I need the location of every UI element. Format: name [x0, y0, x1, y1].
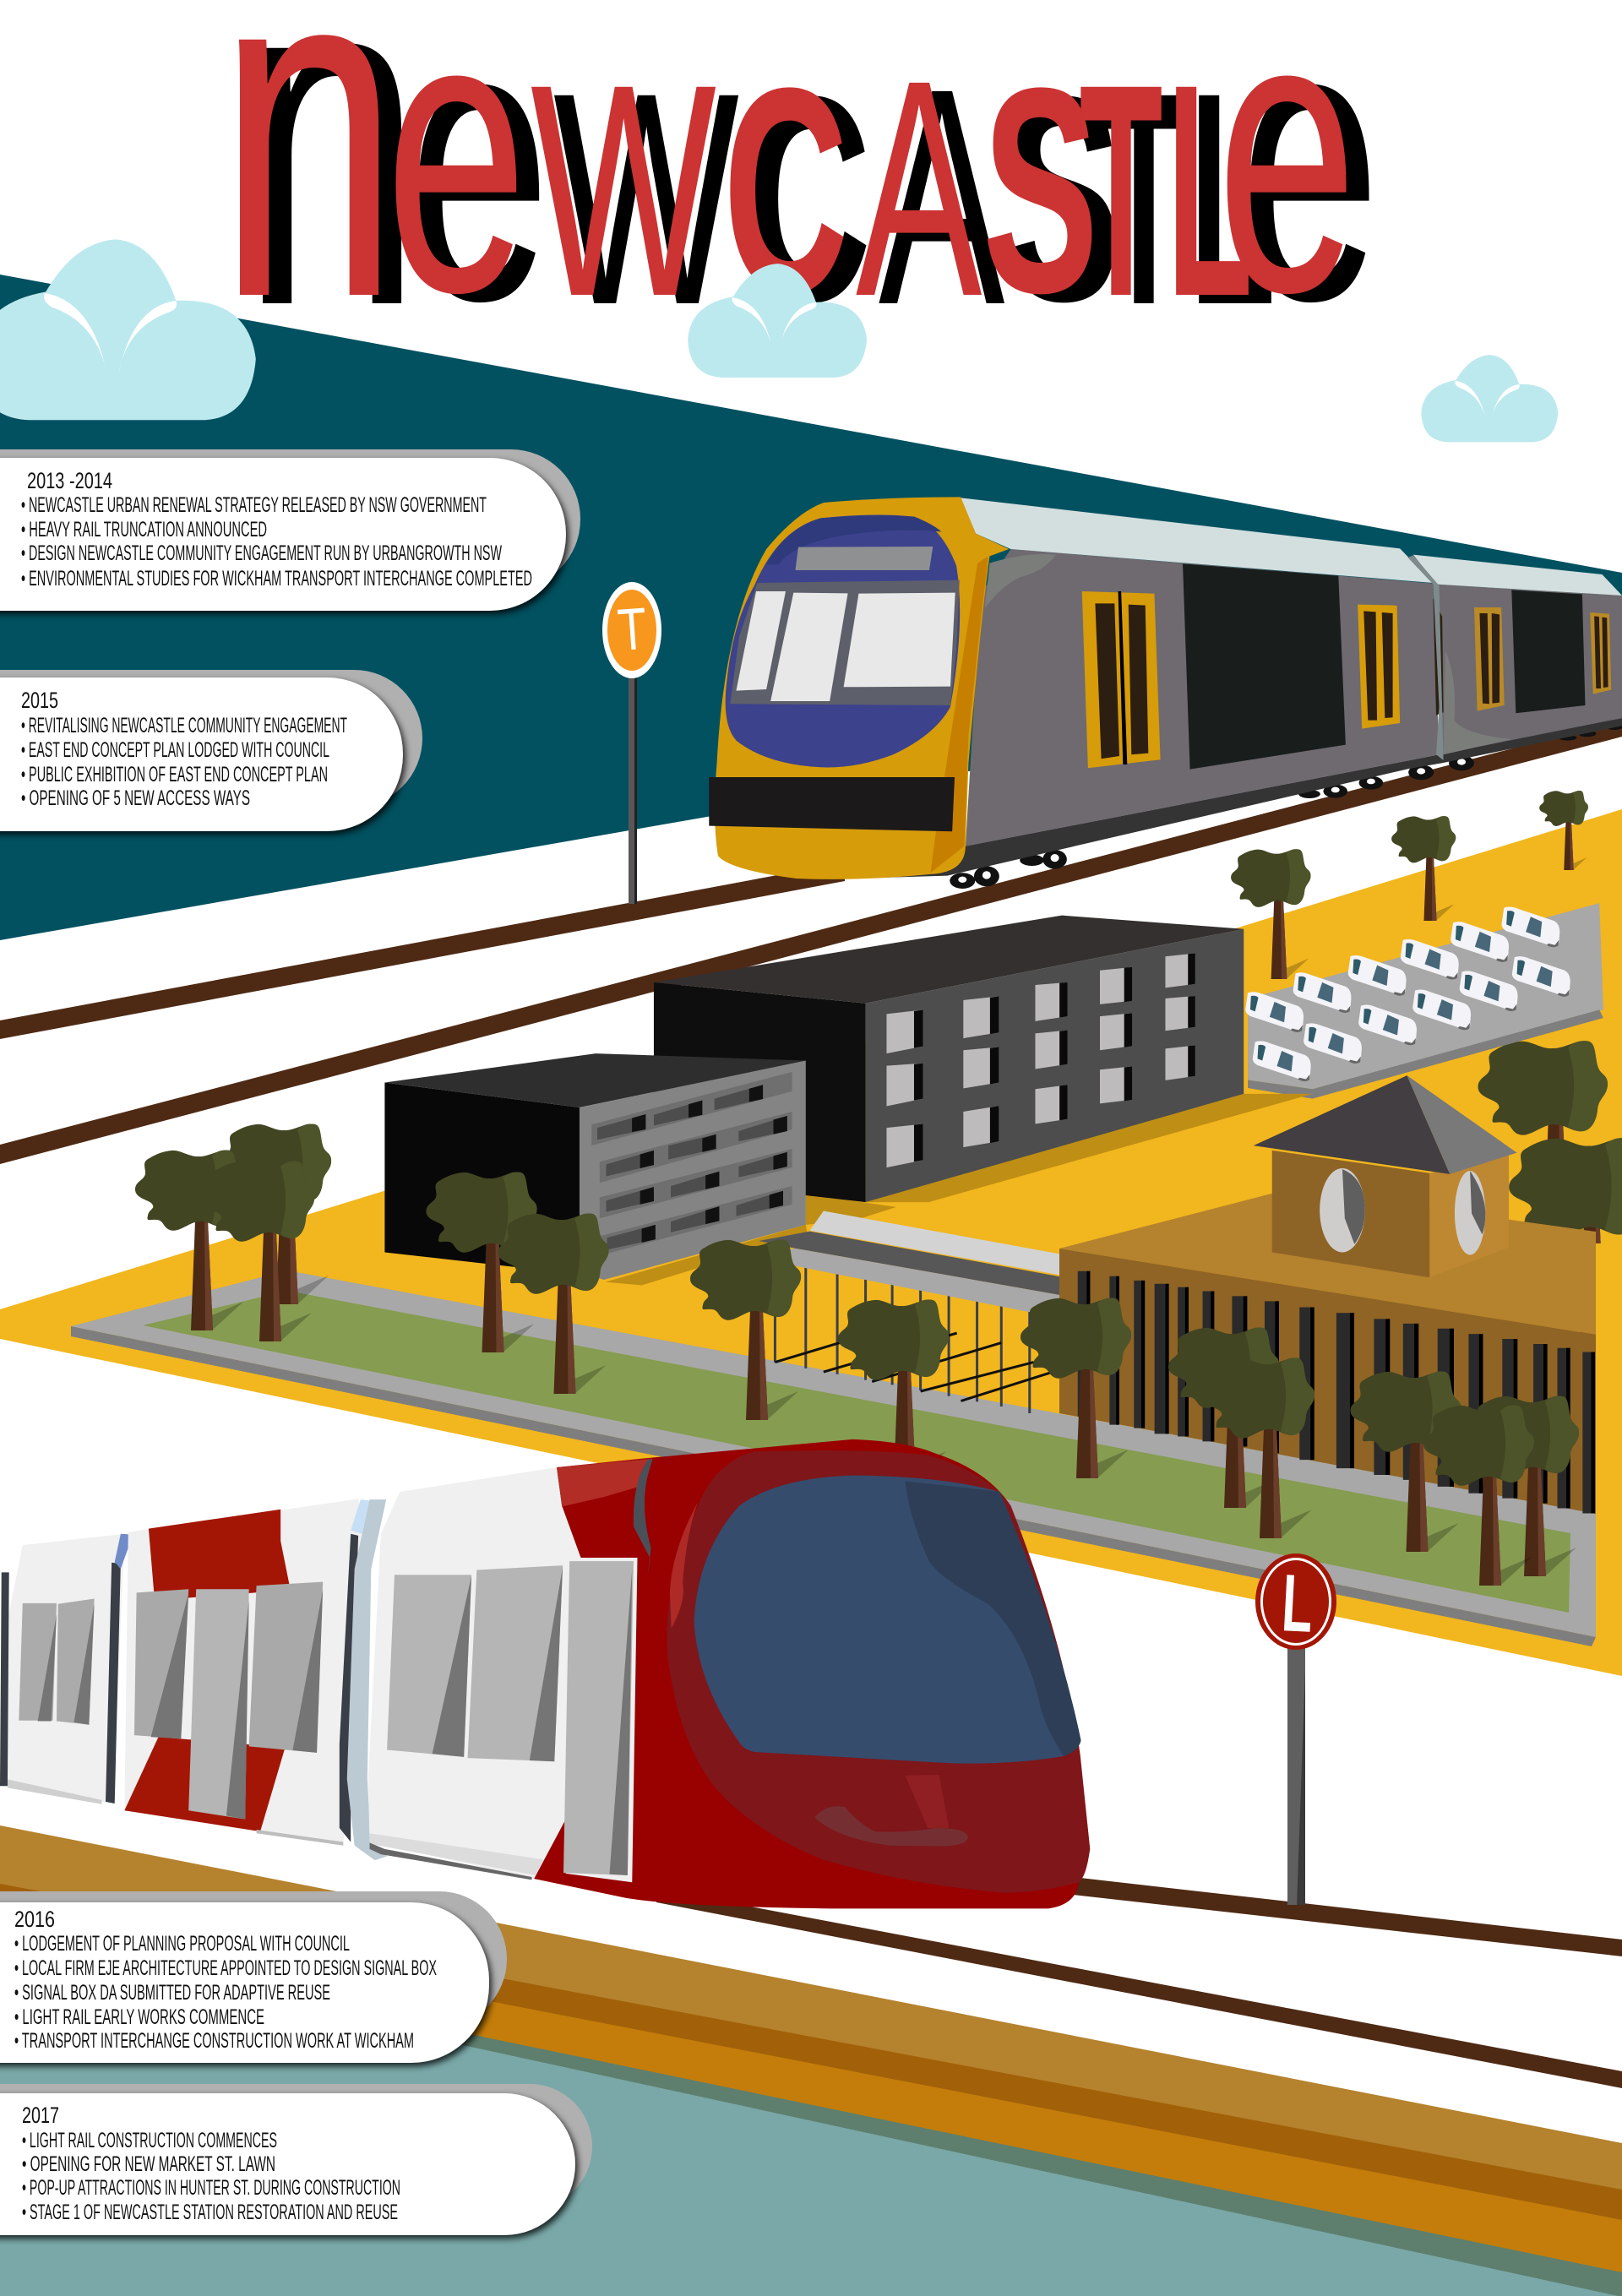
- middle carriage: [124, 1499, 388, 1860]
- panel: 2013-2014: • DESIGN NEWCASTLE COMMUNITY ENGAGEMENT RUN BY URBANGROWTH NSW: [21, 541, 502, 565]
- panel: 2015: • PUBLIC EXHIBITION OF EAST END CONCEPT PLAN: [21, 763, 328, 786]
- T sign: T: [616, 596, 649, 663]
- yellow ground: [0, 809, 1622, 1676]
- roofs: [961, 498, 1433, 583]
- panel: 2016: • SIGNAL BOX DA SUBMITTED FOR ADAPTIVE REUSE: [14, 1981, 330, 2005]
- panel: 2013-2014: • HEAVY RAIL TRUNCATION ANNOUNCED: [21, 518, 267, 541]
- cloud: right: [1421, 355, 1558, 442]
- light rail tram: [0, 1439, 1090, 1908]
- cloud: left: [0, 239, 256, 420]
- panel: 2016: • TRANSPORT INTERCHANGE CONSTRUCTION WORK AT WICKHAM: [14, 2029, 414, 2053]
- panel: 2013-2014: • NEWCASTLE URBAN RENEWAL STRATEGY RELEASED BY NSW GOVERNMENT: [21, 493, 487, 517]
- panel: 2015: [0, 670, 422, 831]
- L sign: L: [1280, 1558, 1315, 1649]
- title: S: [982, 28, 1098, 354]
- panel: 2016: 2016: [14, 1907, 55, 1932]
- panel: 2015: • REVITALISING NEWCASTLE COMMUNITY ENGAGEMENT: [21, 714, 347, 737]
- car park: [1245, 903, 1603, 1099]
- river bank bands: [0, 1825, 1622, 2296]
- panel: 2013-2014: 2013 -2014: [27, 468, 112, 493]
- low office building: [384, 1053, 808, 1285]
- title: L: [1167, 22, 1253, 360]
- title: C: [723, 29, 848, 354]
- heavy rail train: [709, 497, 1622, 889]
- front cab: [715, 497, 1009, 879]
- light rail tracks: [656, 1877, 1622, 2088]
- panel: 2016: [0, 1891, 507, 2063]
- landscaped platform: [71, 1270, 1596, 1646]
- carriage bodies: [966, 549, 1440, 846]
- coupling: [1433, 598, 1444, 715]
- panel: 2013-2014: • ENVIRONMENTAL STUDIES FOR WICKHAM TRANSPORT INTERCHANGE COMPLETED: [21, 567, 532, 590]
- railway shelter and fence: [759, 1211, 1059, 1413]
- buildings, car park and shelter: [384, 903, 1603, 1413]
- title: W: [531, 23, 718, 360]
- teal sky band: [0, 275, 1622, 940]
- heavy rail tracks: [0, 720, 1622, 1164]
- cloud: centre: [688, 264, 867, 378]
- front carriage: [368, 1467, 638, 1882]
- red nose: [534, 1439, 1090, 1908]
- background trees: [1231, 791, 1622, 1379]
- rear carriage: [0, 1534, 132, 1804]
- panel: 2017: 2017: [22, 2103, 59, 2128]
- L sign: [1255, 1553, 1336, 1905]
- panel: 2017: • STAGE 1 OF NEWCASTLE STATION RESTORATION AND REUSE: [22, 2201, 398, 2224]
- T sign: [602, 582, 661, 904]
- panel: 2015: • OPENING OF 5 NEW ACCESS WAYS: [21, 786, 250, 810]
- panel: 2016: • LOCAL FIRM EJE ARCHITECTURE APPOINTED TO DESIGN SIGNAL BOX: [14, 1956, 437, 1980]
- panel: 2017: [0, 2084, 592, 2235]
- wheels: [950, 723, 1622, 889]
- panel: 2017: • LIGHT RAIL CONSTRUCTION COMMENCES: [22, 2129, 277, 2152]
- panel: 2013-2014: [0, 449, 580, 611]
- tram windscreen: [694, 1476, 1081, 1764]
- foreground trees: [135, 1124, 1579, 1586]
- signal box station: [1059, 1075, 1596, 1514]
- panel: 2017: • OPENING FOR NEW MARKET ST. LAWN: [22, 2152, 275, 2176]
- title: A: [856, 17, 982, 361]
- facade slats: [1078, 1271, 1595, 1513]
- tall office building: [654, 916, 1313, 1225]
- doors and windows: [1082, 591, 1161, 768]
- panel: 2016: • LIGHT RAIL EARLY WORKS COMMENCE: [14, 2005, 264, 2029]
- title: T: [1080, 20, 1162, 359]
- panel: 2016: • LODGEMENT OF PLANNING PROPOSAL WITH COUNCIL: [14, 1932, 350, 1956]
- panel: 2017: • POP-UP ATTRACTIONS IN HUNTER ST. DURING CONSTRUCTION: [22, 2176, 400, 2200]
- clock tower: [1254, 1075, 1517, 1277]
- panel: 2015: 2015: [21, 688, 58, 713]
- title: [217, 0, 1358, 398]
- panel: 2015: • EAST END CONCEPT PLAN LODGED WITH COUNCIL: [21, 738, 329, 762]
